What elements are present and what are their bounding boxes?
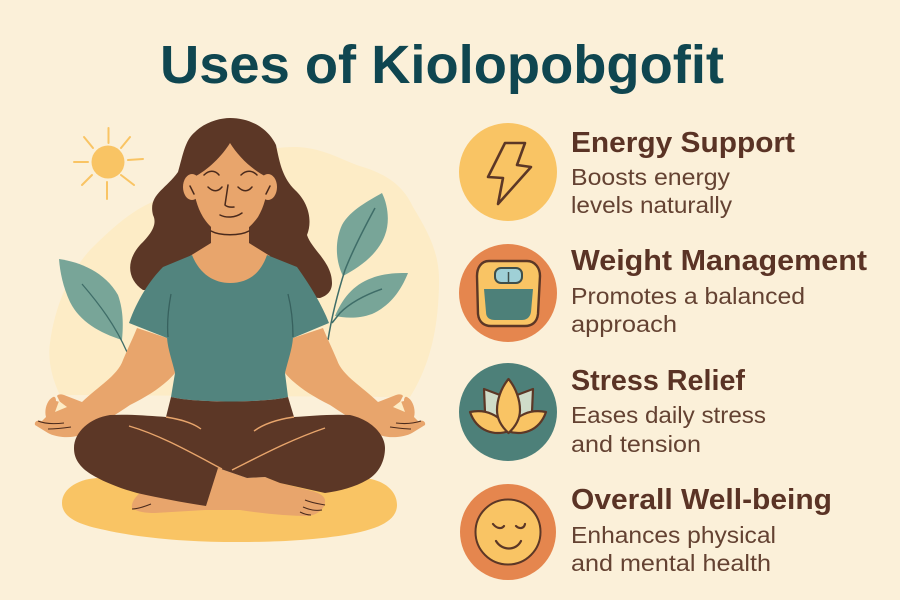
left arm [35,328,175,437]
icon: lotus [459,363,557,461]
item 1: energy support [459,123,795,221]
heading: weight management: Weight Management [571,245,867,277]
item 2: weight management [459,244,867,342]
text: energy support description: levels naturally [571,192,733,218]
icon: sun [74,128,143,199]
yoga mat [62,478,397,542]
right arm [285,328,425,437]
icon: smiling face [460,484,556,580]
text: overall well-being description: Enhances physical [571,522,776,548]
item 3: stress relief [459,363,766,461]
finger details [38,401,421,429]
feet [132,468,325,516]
hair [130,118,332,298]
neck [190,225,270,285]
background blob [49,147,439,397]
icon: lightning bolt [459,123,557,221]
shirt [129,255,329,402]
text: stress relief description: and tension [571,431,701,457]
heading: stress relief: Stress Relief [571,365,745,397]
leaf: right plant [328,193,408,340]
item 4: overall well-being [460,484,832,580]
text: energy support description: Boosts energy [571,164,731,190]
text: overall well-being description: and mental health [571,550,771,576]
leaf: left plant [59,259,127,352]
heading: overall well-being: Overall Well-being [571,484,832,516]
text: stress relief description: Eases daily stress [571,402,766,428]
face [183,143,277,237]
heading: energy support: Energy Support [571,127,795,159]
text: weight management description: approach [571,311,677,337]
title: Uses of Kiolopobgofit [160,35,724,95]
trousers [74,397,385,506]
text: weight management description: Promotes a balanced [571,283,805,309]
icon: weighing scale [459,244,557,342]
